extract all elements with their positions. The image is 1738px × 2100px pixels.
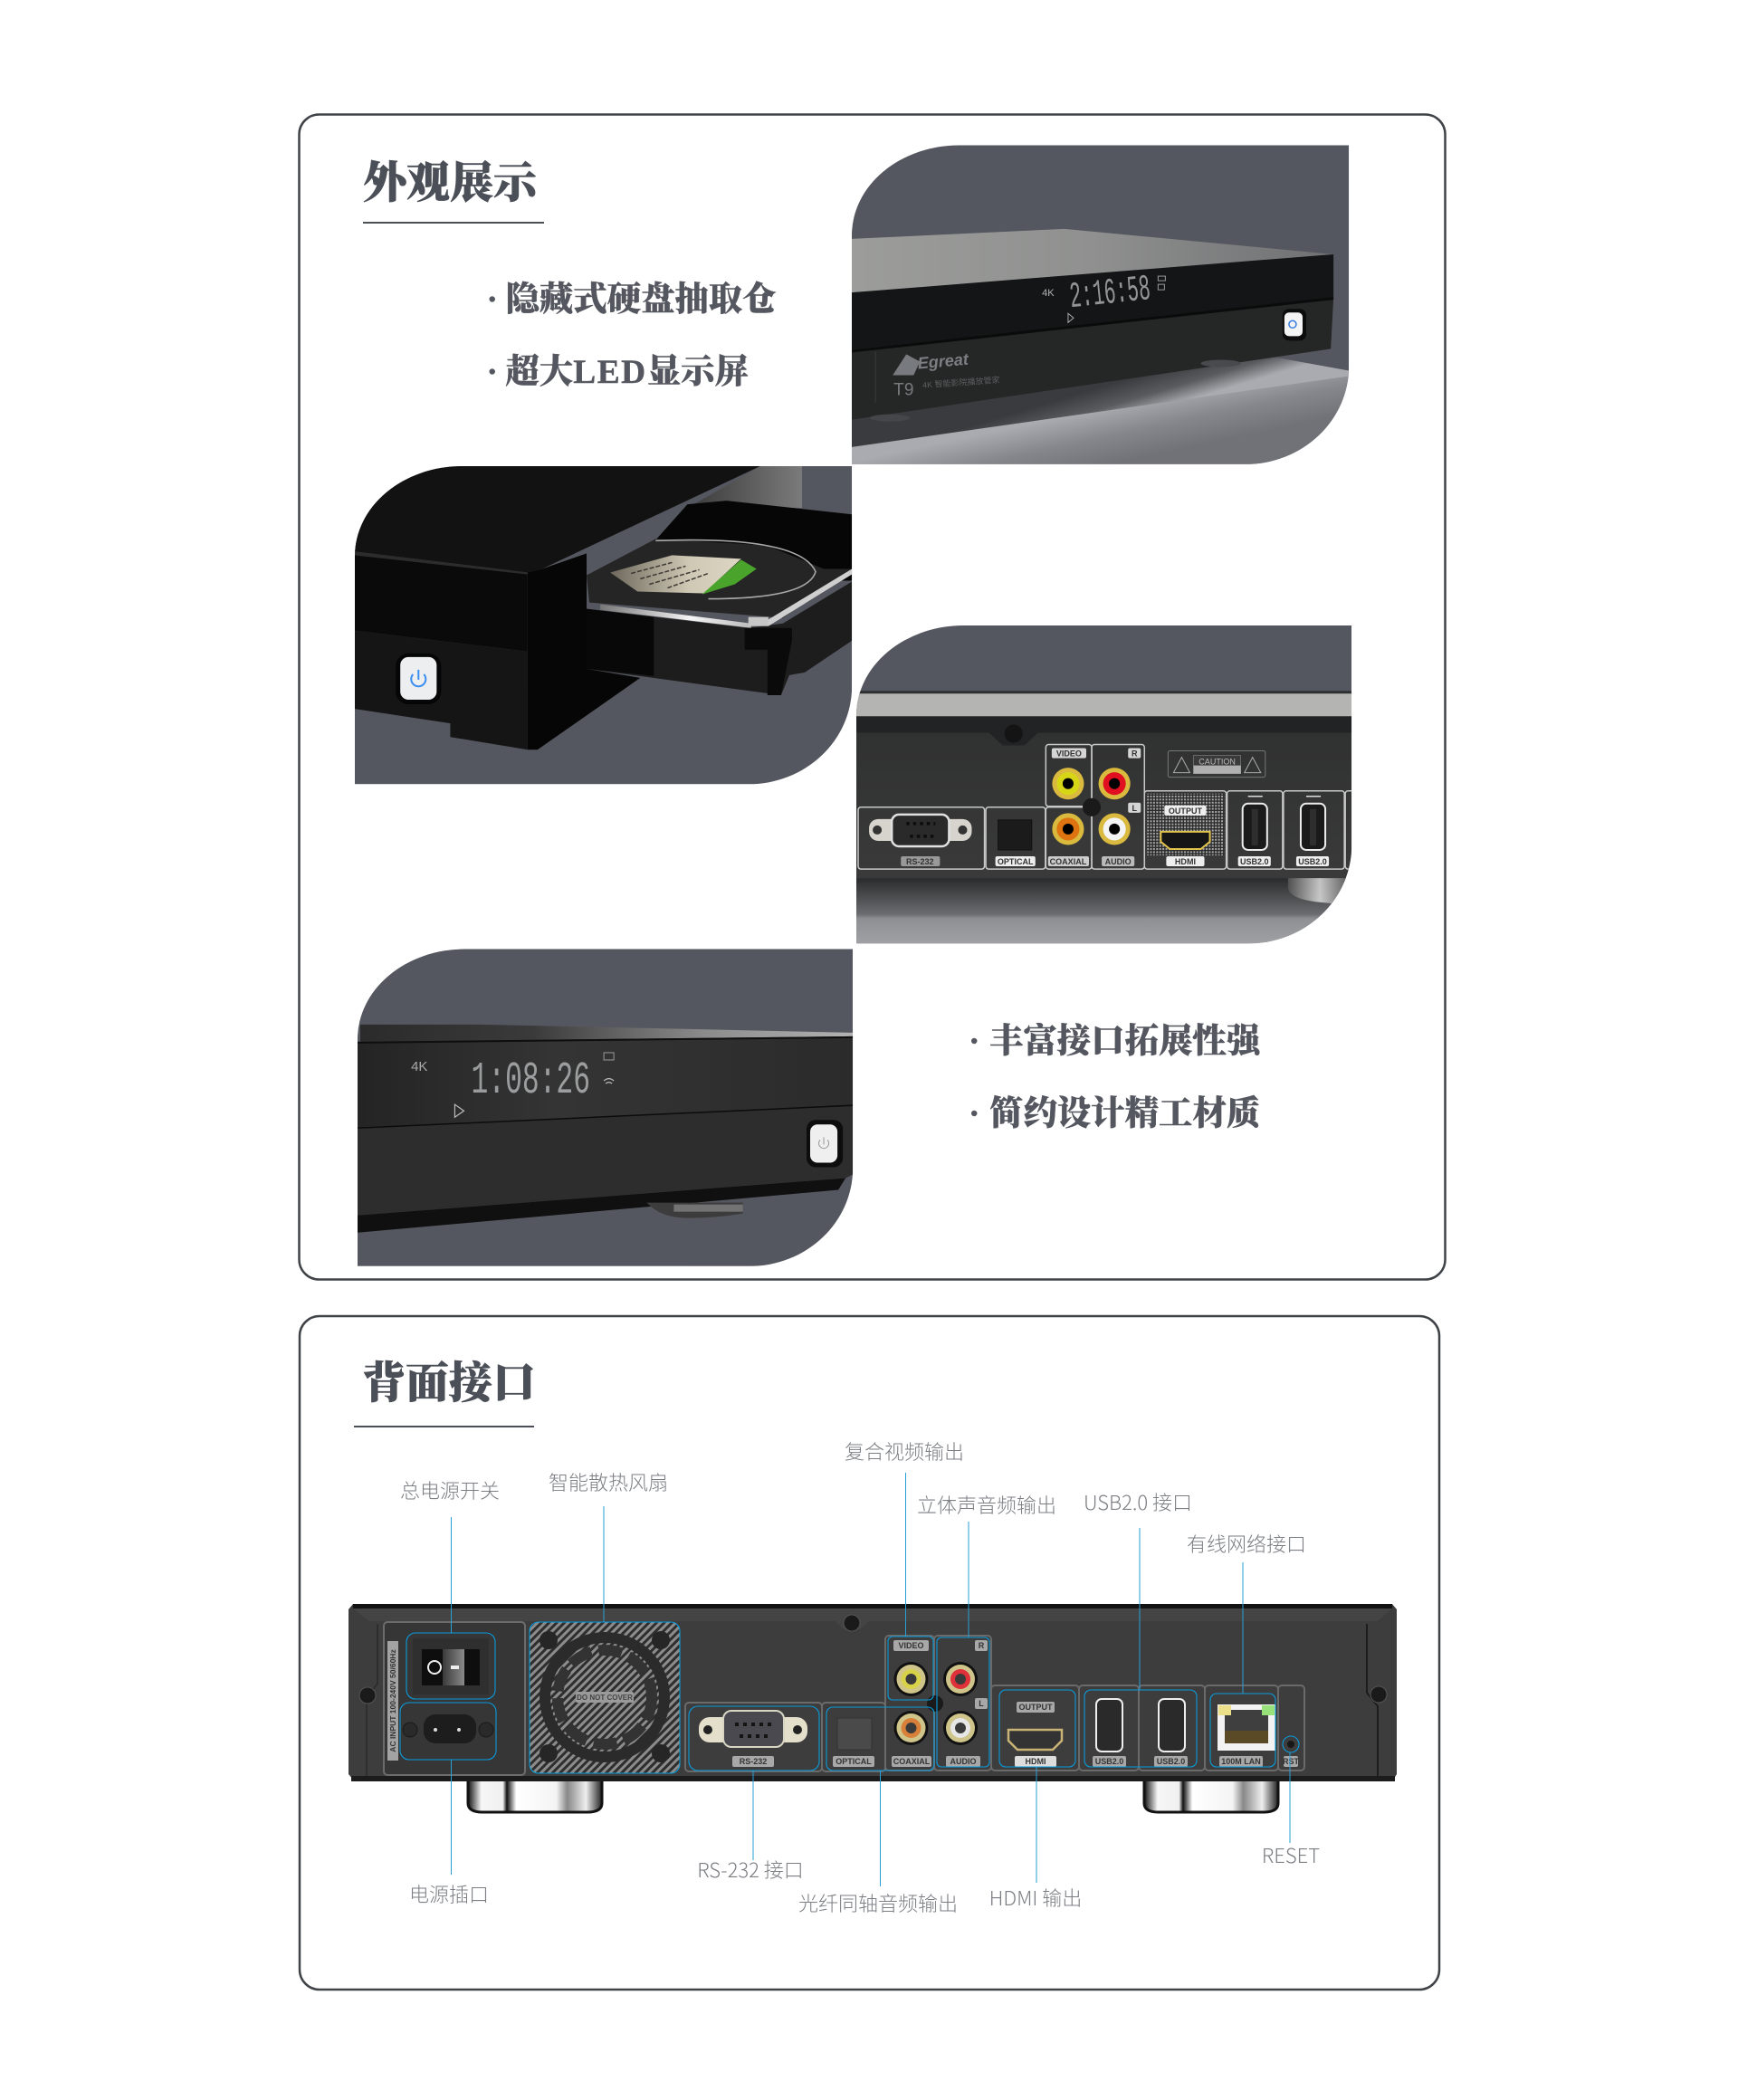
foot bbox=[646, 1203, 743, 1218]
port labels: OUTPUT bbox=[1019, 1703, 1053, 1712]
highlight outlines bbox=[400, 1622, 1299, 1773]
bullet list: top left features: · bbox=[487, 354, 498, 391]
power module bbox=[384, 1622, 525, 1775]
port labels: USB2.0 bbox=[1240, 857, 1269, 866]
screw top bbox=[1005, 724, 1023, 743]
port labels: R bbox=[979, 1641, 985, 1650]
hdmi port bbox=[1147, 794, 1225, 855]
port labels: USB2.0 bbox=[1298, 857, 1327, 866]
port labels: USB2.0 bbox=[1157, 1757, 1185, 1766]
usb ports bbox=[1243, 804, 1325, 850]
power module: AC INPUT 100-240V 50/60Hz bbox=[388, 1649, 397, 1752]
bullet list: top left features: 隐藏式硬盘抽取仓 bbox=[505, 281, 777, 319]
callout labels: 智能散热风扇 bbox=[549, 1467, 668, 1496]
power socket bbox=[403, 1714, 493, 1743]
port labels: RS-232 bbox=[740, 1757, 767, 1766]
callout labels: 总电源开关 bbox=[400, 1475, 500, 1504]
cooling fan bbox=[530, 1622, 680, 1773]
power switch bbox=[413, 1638, 489, 1694]
label: 4K: 4K bbox=[411, 1059, 427, 1074]
logo: Egreat: Egreat bbox=[917, 350, 970, 372]
port labels: HDMI bbox=[1175, 857, 1196, 866]
bullet list: lower right features bbox=[969, 1021, 1265, 1133]
callout labels: 复合视频输出 bbox=[845, 1437, 964, 1465]
callout labels: USB2.0 接口 bbox=[1084, 1487, 1192, 1516]
caution plate bbox=[1168, 751, 1265, 778]
port labels: OPTICAL bbox=[836, 1757, 872, 1766]
bullet list: top left features: · bbox=[487, 282, 498, 319]
photo: front view with clock 1:08:26 bbox=[358, 949, 853, 1266]
port labels: HDMI bbox=[1025, 1757, 1046, 1766]
icon: input bbox=[604, 1053, 614, 1060]
icon: power button bbox=[396, 654, 441, 704]
label: 4K: 4K bbox=[1042, 288, 1055, 299]
bullet list: top left features: 超大LED显示屏 bbox=[505, 353, 749, 391]
port labels: AUDIO bbox=[950, 1757, 976, 1766]
front panel clock: 2:16:58 bbox=[1068, 270, 1152, 319]
port labels: R bbox=[1132, 749, 1138, 759]
port labels: VIDEO bbox=[898, 1641, 924, 1650]
callout labels bbox=[400, 1437, 1320, 1917]
optical port bbox=[837, 1718, 872, 1750]
optical port bbox=[998, 820, 1032, 850]
callout labels: 有线网络接口 bbox=[1187, 1529, 1306, 1558]
infographic canvas bbox=[298, 113, 1447, 1991]
panel: exterior showcase bbox=[299, 114, 1445, 1280]
port labels: AUDIO bbox=[1105, 857, 1132, 866]
heading: rear interfaces: 背面接口 bbox=[362, 1360, 536, 1408]
rca sockets bbox=[1052, 768, 1131, 845]
port labels bbox=[901, 749, 1329, 866]
panel: rear interfaces bbox=[300, 1316, 1439, 1990]
clock display: 1:08:26 bbox=[471, 1055, 590, 1107]
callout labels: 立体声音频输出 bbox=[917, 1490, 1056, 1519]
icon: wifi bbox=[604, 1079, 614, 1083]
port labels: RS-232 bbox=[906, 857, 934, 866]
hdmi port bbox=[1008, 1730, 1062, 1750]
screw centre bbox=[1083, 798, 1101, 816]
port labels: L bbox=[1132, 804, 1137, 813]
logo: Egreat: T9 bbox=[893, 381, 913, 400]
feet bbox=[468, 1781, 1278, 1812]
photo: open hard drive bay bbox=[355, 466, 852, 784]
hard drive bbox=[587, 539, 852, 695]
rs-232 connector bbox=[869, 815, 972, 846]
usb ports bbox=[1096, 1699, 1185, 1752]
port labels: VIDEO bbox=[1056, 749, 1082, 759]
port labels: 100M LAN bbox=[1221, 1757, 1261, 1766]
icon: status bbox=[1158, 276, 1165, 290]
port labels: COAXIAL bbox=[1050, 857, 1087, 866]
heading: exterior showcase: 外观展示 bbox=[363, 159, 541, 207]
connector modules bbox=[685, 1636, 1304, 1771]
callout labels: RESET bbox=[1262, 1840, 1320, 1869]
lan port bbox=[1218, 1704, 1275, 1751]
icon: play bbox=[454, 1104, 463, 1117]
rca sockets bbox=[894, 1662, 978, 1745]
port labels: COAXIAL bbox=[893, 1757, 931, 1766]
port labels bbox=[732, 1640, 1300, 1767]
callout labels: HDMI 输出 bbox=[989, 1883, 1082, 1912]
bullet list: lower right features: 丰富接口拓展性强 bbox=[989, 1021, 1265, 1061]
device rear body bbox=[349, 1604, 1397, 1781]
screws bbox=[359, 1615, 1387, 1704]
port labels: OPTICAL bbox=[998, 857, 1034, 866]
icon: power button bbox=[1283, 309, 1306, 340]
bullet list: top left features bbox=[487, 281, 777, 391]
photo: rear connectors close-up bbox=[856, 625, 1363, 943]
caution plate: CAUTION bbox=[1198, 758, 1236, 767]
callout labels: RS-232 接口 bbox=[697, 1855, 804, 1884]
connector modules bbox=[858, 745, 1363, 869]
logo: Egreat: 4K 智能影院播放管家 bbox=[922, 375, 1000, 390]
icon: power button bbox=[807, 1120, 843, 1167]
port labels: OUTPUT bbox=[1169, 807, 1202, 816]
leader lines bbox=[451, 1473, 1290, 1886]
rs-232 port bbox=[699, 1711, 807, 1747]
bullet list: lower right features: · bbox=[969, 1095, 979, 1133]
cooling fan: DO NOT COVER bbox=[577, 1694, 633, 1702]
icon: play triangle bbox=[1068, 313, 1074, 322]
port labels: RST bbox=[1283, 1757, 1300, 1766]
bullet list: lower right features: · bbox=[969, 1023, 979, 1061]
usb icons bbox=[1247, 796, 1322, 797]
callout labels: 电源插口 bbox=[409, 1879, 489, 1908]
logo: Egreat bbox=[893, 353, 999, 395]
photo: front view with clock 2:16:58 bbox=[852, 145, 1349, 464]
callout labels: 光纤同轴音频输出 bbox=[798, 1888, 958, 1917]
bullet list: lower right features: 简约设计精工材质 bbox=[989, 1095, 1261, 1133]
port labels: L bbox=[979, 1699, 984, 1708]
reset pinhole bbox=[1287, 1741, 1294, 1748]
port labels: USB2.0 bbox=[1095, 1757, 1123, 1766]
